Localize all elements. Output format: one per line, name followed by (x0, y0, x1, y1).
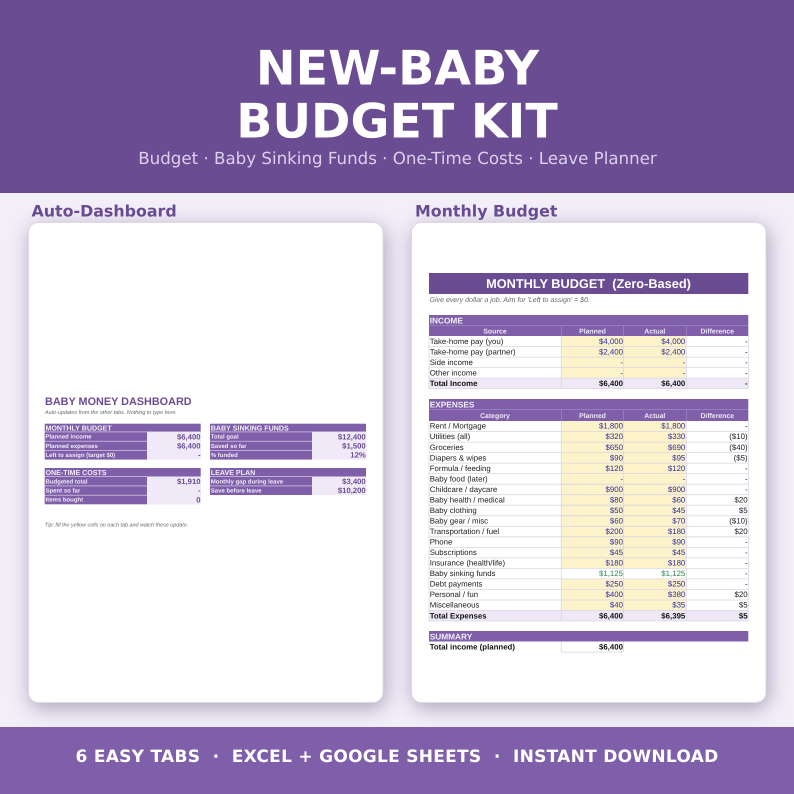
table: expenses: $900 (606, 485, 624, 494)
table: expenses: $80 (610, 495, 624, 504)
table: expenses: $90 (610, 453, 624, 462)
table: expenses: $50 (610, 506, 624, 515)
table: summary (429, 631, 748, 652)
table: monthly budget summary: $6,400 (177, 432, 200, 441)
table: summary: $6,400 (599, 642, 624, 652)
table: expenses: $320 (606, 432, 624, 441)
table: expenses: $95 (672, 453, 686, 462)
title: BUDGET KIT (236, 94, 558, 150)
dashboard title: BABY MONEY DASHBOARD (45, 396, 192, 408)
panel: auto-dashboard sheet (28, 222, 383, 702)
table: baby sinking funds summary: $12,400 (338, 432, 366, 441)
sheet note: Give every dollar a job. Aim for 'Left to assign' = $0. (430, 296, 590, 304)
table: leave plan summary (210, 468, 366, 495)
table: expenses: $90 (672, 538, 686, 547)
table: income: Planned (579, 328, 606, 336)
table: expenses: Diapers & wipes (430, 453, 486, 462)
table: baby sinking funds summary: Total goal (211, 434, 239, 441)
subtitle: Budget · Baby Sinking Funds · One-Time Costs · Leave Planner (138, 149, 657, 168)
table: income: Source (483, 328, 507, 336)
table: expenses: $250 (606, 580, 624, 589)
table: expenses: $900 (668, 485, 686, 494)
table: expenses: $120 (606, 464, 624, 473)
table: expenses: - (683, 474, 686, 483)
table: income: $2,400 (661, 348, 686, 356)
table: expenses: - (745, 569, 748, 578)
table: expenses: $20 (735, 495, 748, 504)
footer banner: 6 EASY TABS · EXCEL + GOOGLE SHEETS · INSTANT DOWNLOAD (76, 747, 718, 767)
table: income: $6,400 (599, 379, 624, 388)
table: baby sinking funds summary: Saved so far (211, 443, 247, 450)
table: expenses: Total Expenses (430, 611, 487, 620)
table: expenses: $400 (606, 590, 624, 599)
table: expenses: $1,800 (661, 422, 686, 431)
table: expenses: $45 (672, 548, 686, 557)
table: one-time costs summary (45, 468, 201, 504)
table: expenses: $35 (672, 601, 686, 610)
table: expenses: Baby sinking funds (430, 569, 496, 578)
table: expenses: $5 (739, 601, 748, 610)
table: monthly budget summary: - (198, 451, 201, 460)
table: expenses: $380 (668, 590, 686, 599)
table: income: INCOME (430, 315, 463, 325)
table: expenses: $5 (739, 611, 748, 620)
table: one-time costs summary: Spent so far (46, 488, 81, 494)
table: leave plan summary: LEAVE PLAN (211, 469, 255, 477)
table: leave plan summary: Save before leave (211, 488, 262, 494)
table: expenses: Baby gear / misc (430, 516, 488, 526)
table: one-time costs summary: $1,910 (177, 477, 200, 486)
table: expenses: Utilities (all) (430, 432, 471, 441)
panel: monthly budget sheet (412, 222, 766, 702)
footer banner (0, 727, 794, 794)
table: expenses: - (745, 464, 748, 473)
table: expenses: $20 (735, 590, 748, 599)
table: expenses: Subscriptions (430, 548, 477, 557)
table: expenses: $200 (606, 527, 624, 536)
header banner (0, 0, 794, 193)
table: expenses: Actual (644, 413, 665, 420)
table: expenses: Personal / fun (430, 590, 478, 599)
table: monthly budget summary (45, 424, 201, 460)
table: expenses: $60 (672, 495, 686, 504)
table: income: Difference (700, 328, 734, 336)
table: expenses: Difference (700, 413, 734, 420)
sheet title: MONTHLY BUDGET (Zero-Based) (486, 276, 691, 291)
table: expenses: $1,125 (599, 569, 624, 578)
table: one-time costs summary: ONE-TIME COSTS (46, 469, 107, 477)
table: expenses: - (745, 559, 748, 568)
table: expenses: Baby health / medical (430, 495, 505, 504)
table: summary: SUMMARY (430, 632, 473, 642)
table: leave plan summary: $10,200 (338, 486, 366, 495)
table: expenses: Debt payments (430, 580, 483, 589)
table: income: Total Income (430, 379, 478, 388)
table: income: Side income (430, 358, 474, 367)
heading: Monthly Budget: Monthly Budget (415, 202, 558, 220)
table: expenses: Childcare / daycare (430, 485, 498, 494)
table: expenses: ($5) (734, 453, 748, 462)
table: expenses: Formula / feeding (430, 464, 491, 473)
table: expenses: $180 (668, 527, 686, 536)
table: expenses: $20 (735, 527, 748, 536)
table: expenses: - (745, 474, 748, 483)
table: income: - (683, 369, 686, 378)
table: expenses: $330 (668, 432, 686, 441)
table: expenses: $40 (610, 601, 624, 610)
table: expenses: Groceries (430, 443, 464, 452)
table: expenses: - (745, 485, 748, 494)
table: leave plan summary: $3,400 (342, 477, 366, 486)
table: expenses: EXPENSES (430, 400, 475, 410)
table: income: Other income (430, 369, 477, 378)
table: expenses: $180 (606, 559, 624, 568)
table: income: - (745, 379, 748, 388)
table: expenses (429, 399, 748, 621)
table: monthly budget summary: MONTHLY BUDGET (46, 424, 112, 432)
table: baby sinking funds summary (210, 424, 366, 460)
table: income: - (745, 358, 748, 367)
table: expenses: Planned (579, 413, 606, 420)
dashboard note: Auto-updates from the other tabs. Nothing to type here. (44, 410, 177, 416)
table: expenses: Phone (430, 538, 453, 547)
table: income: $2,400 (599, 348, 624, 356)
table: income: - (745, 337, 748, 346)
title (236, 42, 558, 150)
table: expenses: - (620, 474, 623, 483)
table: income: Take-home pay (partner) (430, 348, 516, 356)
table: expenses: $70 (672, 516, 686, 526)
sheet title (429, 273, 748, 294)
table: leave plan summary: Monthly gap during leave (211, 478, 284, 485)
table: expenses: $120 (668, 464, 686, 473)
table: income (429, 315, 748, 389)
table: expenses: $1,125 (661, 569, 686, 578)
table: baby sinking funds summary: % funded (211, 452, 238, 459)
table: income: Actual (644, 328, 665, 336)
dashboard tip: Tip: fill the yellow cells on each tab and watch these update. (45, 522, 188, 528)
table: expenses: $45 (610, 548, 624, 557)
table: one-time costs summary: 0 (196, 495, 200, 504)
table: income: - (620, 358, 623, 367)
table: baby sinking funds summary: BABY SINKING FUNDS (211, 424, 289, 432)
table: one-time costs summary: Budgeted total (46, 478, 88, 485)
table: expenses: $5 (739, 506, 748, 515)
table: expenses: $6,400 (599, 611, 624, 620)
table: expenses: $1,800 (599, 422, 624, 431)
table: expenses: $45 (672, 506, 686, 515)
table: expenses: - (745, 548, 748, 557)
table: expenses: - (745, 422, 748, 431)
table: monthly budget summary: $6,400 (177, 442, 200, 450)
heading: Auto-Dashboard: Auto-Dashboard (32, 202, 177, 220)
table: expenses: - (745, 580, 748, 589)
table: expenses: $60 (610, 516, 624, 526)
table: income: - (620, 369, 623, 378)
table: monthly budget summary: Planned income (46, 434, 92, 441)
table: expenses: Transportation / fuel (430, 527, 499, 536)
table: expenses: $650 (606, 443, 624, 452)
table: income: $4,000 (599, 337, 624, 346)
table: expenses: Insurance (health/life) (430, 559, 506, 568)
table: expenses: Miscellaneous (430, 601, 479, 610)
table: one-time costs summary: Items bought (46, 497, 83, 504)
table: expenses: $250 (668, 580, 686, 589)
table: expenses: ($40) (729, 443, 748, 452)
table: monthly budget summary: Planned expenses (46, 443, 99, 450)
table: income: $6,400 (661, 379, 686, 388)
title: NEW-BABY (256, 42, 540, 96)
table: one-time costs summary: - (198, 486, 201, 495)
table: expenses: $90 (610, 538, 624, 547)
table: expenses: Baby clothing (430, 506, 477, 515)
table: expenses: Category (480, 413, 510, 420)
table: expenses: $180 (668, 559, 686, 568)
table: income: - (745, 369, 748, 378)
table: expenses: - (745, 538, 748, 547)
table: income: Take-home pay (you) (430, 337, 504, 346)
table: summary: Total income (planned) (430, 642, 515, 652)
table: expenses: ($10) (729, 516, 748, 526)
table: baby sinking funds summary: $1,500 (342, 442, 366, 450)
table: expenses: $6,395 (661, 611, 686, 620)
table: monthly budget summary: Left to assign (target $0) (46, 452, 115, 459)
table: expenses: ($10) (729, 432, 748, 441)
table: income: $4,000 (661, 337, 686, 346)
table: expenses: Rent / Mortgage (430, 422, 487, 431)
table: income: - (745, 348, 748, 356)
table: income: - (683, 358, 686, 367)
table: expenses: $690 (668, 443, 686, 452)
table: expenses: Baby food (later) (430, 474, 488, 483)
table: baby sinking funds summary: 12% (350, 451, 366, 460)
